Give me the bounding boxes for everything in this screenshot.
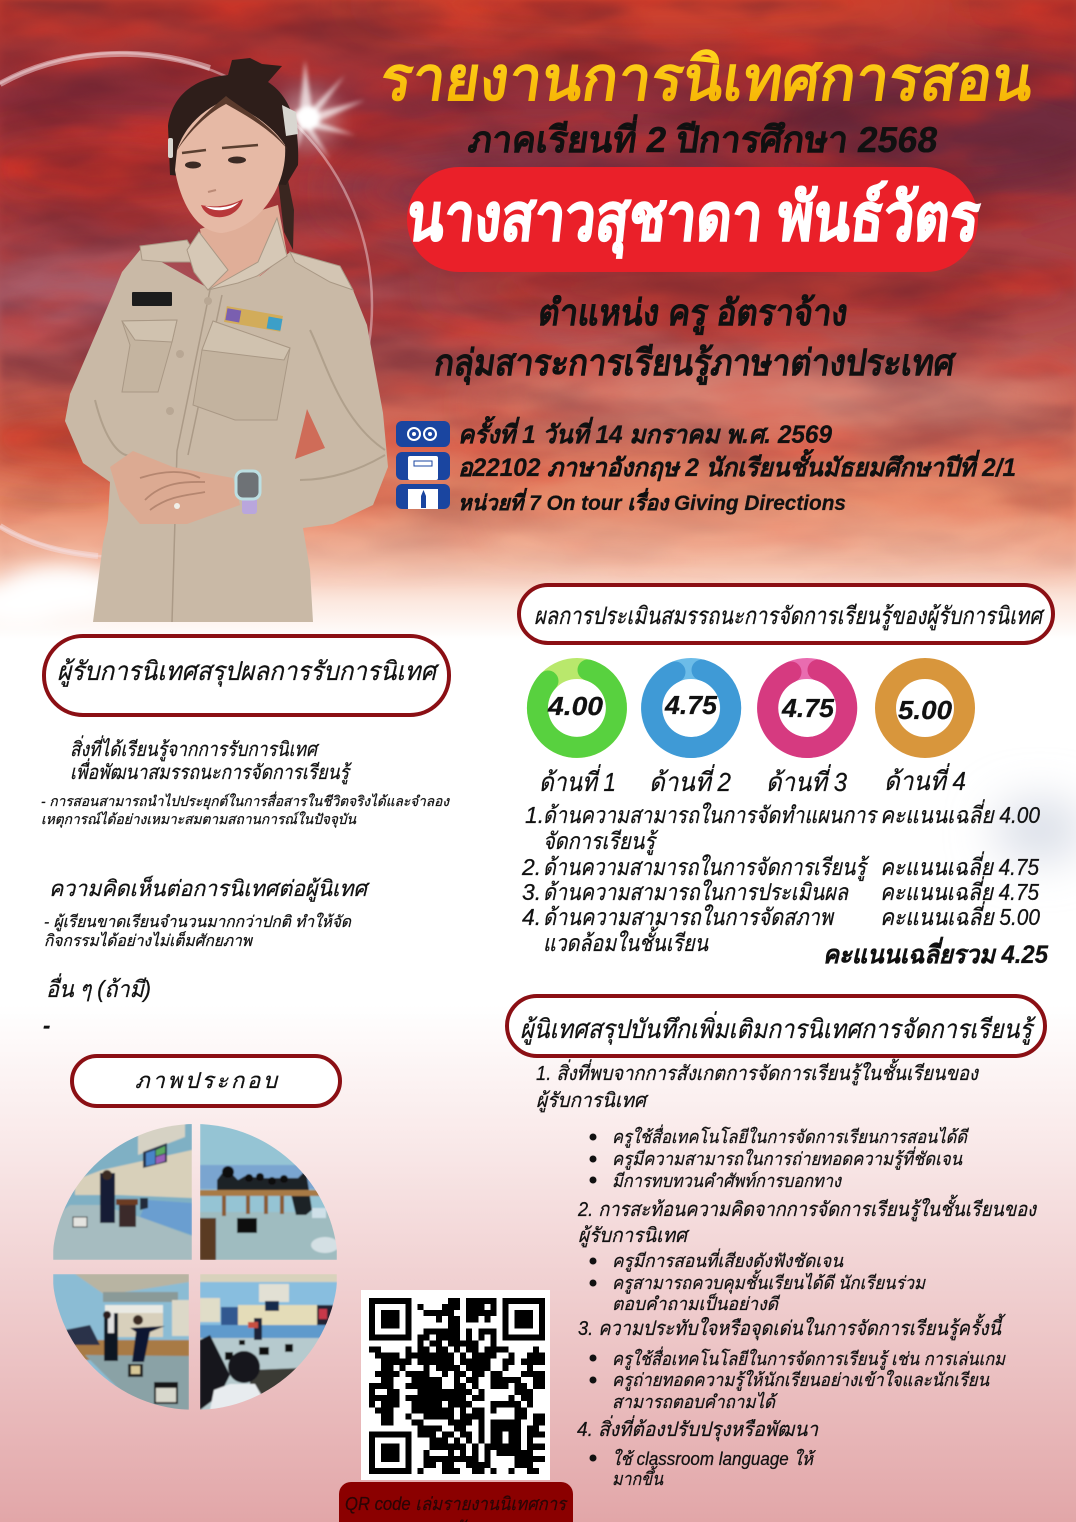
text block: other notes: อื่น ๆ (ถ้ามี): [46, 973, 151, 1002]
supervision session details: หน่วยที่ 7 On tour เรื่อง Giving Directions: [458, 488, 846, 515]
donut labels: ด้านที่ 1: [539, 764, 616, 797]
icon: briefcase: [396, 452, 450, 480]
text block: opinion on supervision: - ผู้เรียนขาดเรียนจำนวนมากกว่าปกติ ทำให้จัด: [44, 912, 353, 932]
note 3: strengths: ครูถ่ายทอดความรู้ให้นักเรียนอย่างเข้าใจและนักเรียน: [612, 1369, 990, 1391]
icon: pencil case: [396, 484, 450, 509]
score list by aspect: 4.: [522, 904, 541, 930]
note 3: strengths: 3. ความประทับใจหรือจุดเด่นในการจัดการเรียนรู้ครั้งนี้: [578, 1313, 1006, 1341]
QR code caption tag: QR code เล่มรายงานนิเทศการ: [345, 1494, 568, 1514]
note 3: strengths: สามารถตอบคำถามได้: [612, 1391, 779, 1412]
note 4: areas to improve: ใช้ classroom language ให้: [612, 1448, 817, 1469]
note 1: classroom observations: [536, 1058, 979, 1191]
position and department: ตำแหน่ง ครู อัตราจ้าง: [535, 292, 851, 336]
photo: students at desks: [200, 1123, 339, 1260]
photo: teacher beside whiteboard: [53, 1123, 192, 1260]
title: รายงานการนิเทศการสอน: [376, 45, 1038, 114]
heading pill: competency results: [519, 585, 1053, 643]
text block: what was learned: เหตุการณ์ได้อย่างเหมาะสมตามสถานการณ์ในปัจจุบัน: [41, 811, 356, 828]
position and department: กลุ่มสาระการเรียนรู้ภาษาต่างประเทศ: [431, 342, 959, 386]
score list by aspect: [521, 799, 1040, 956]
donut labels: ด้านที่ 3: [766, 764, 847, 797]
heading pill: supervisee summary: ผู้รับการนิเทศสรุปผลการรับการนิเทศ: [57, 656, 440, 687]
text block: what was learned: - การสอนสามารถนำไปประยุกต์ในการสื่อสารในชีวิตจริงได้และจำลอง: [41, 791, 450, 810]
score list by aspect: คะแนนเฉลี่ย 5.00: [880, 901, 1040, 930]
overall average score: คะแนนเฉลี่ยรวม 4.25: [823, 936, 1049, 969]
text block: opinion on supervision: กิจกรรมได้อย่างไม่เต็มศักยภาพ: [44, 931, 253, 950]
note 2: reflection: ผู้รับการนิเทศ: [578, 1225, 690, 1248]
note 1: classroom observations: ครูมีความสามารถในการถ่ายทอดความรู้ที่ชัดเจน: [612, 1146, 963, 1170]
note 4: areas to improve: มากขึ้น: [612, 1465, 664, 1489]
note 2: reflection: ครูมีการสอนที่เสียงดังฟังชัดเจน: [612, 1248, 844, 1272]
score list by aspect: จัดการเรียนรู้: [543, 828, 658, 855]
text block: what was learned: สิ่งที่ได้เรียนรู้จากการรับการนิเทศ: [70, 735, 320, 762]
text block: opinion on supervision: [44, 875, 371, 950]
text block: opinion on supervision: ความคิดเห็นต่อการนิเทศต่อผู้นิเทศ: [49, 875, 371, 902]
note 2: reflection: [577, 1194, 1037, 1314]
supervision session details: ครั้งที่ 1 วันที่ 14 มกราคม พ.ศ. 2569: [458, 416, 832, 449]
donut labels: [539, 763, 966, 797]
decorative light ring with sparkle: [0, 53, 372, 557]
donut chart: aspect 4 score 5.00: 5.00: [898, 695, 953, 725]
score list by aspect: แวดล้อมในชั้นเรียน: [543, 926, 709, 956]
note 1: classroom observations: 1. สิ่งที่พบจากการสังเกตการจัดการเรียนรู้ในชั้นเรียนของ: [536, 1058, 979, 1086]
donut chart: aspect 1 score 4.00: [537, 668, 616, 748]
QR code: [361, 1290, 550, 1480]
score list by aspect: 2.: [521, 854, 541, 880]
donut chart: aspect 3 score 4.75: 4.75: [781, 693, 835, 723]
score list by aspect: 1.: [525, 802, 544, 828]
text block: what was learned: เพื่อพัฒนาสมรรถนะการจัดการเรียนรู้: [70, 758, 353, 785]
text block: other notes: -: [43, 1013, 50, 1038]
score list by aspect: ด้านความสามารถในการจัดการเรียนรู้: [543, 854, 869, 881]
supervision session details: [458, 416, 1016, 515]
score list by aspect: ด้านความสามารถในการประเมินผล: [543, 879, 849, 905]
text block: other notes: [43, 973, 151, 1038]
position and department: [431, 292, 959, 386]
score list by aspect: คะแนนเฉลี่ย 4.75: [880, 851, 1039, 880]
photo collage in circle: [53, 1123, 339, 1410]
donut labels: ด้านที่ 4: [884, 763, 966, 796]
score list by aspect: ด้านความสามารถในการจัดทำแผนการ: [543, 802, 878, 828]
heading pill: supervisee summary: [44, 636, 449, 715]
QR code caption tag: [339, 1482, 573, 1522]
icon: glasses: [396, 421, 450, 447]
note 1: classroom observations: ครูใช้สื่อเทคโนโลยีในการจัดการเรียนการสอนได้ดี: [612, 1124, 970, 1148]
portrait: teacher in khaki uniform: [65, 58, 388, 622]
heading pill: supervisor notes: [507, 996, 1045, 1056]
red name banner: [403, 167, 984, 272]
photo: classroom from behind students: [200, 1274, 337, 1410]
score list by aspect: คะแนนเฉลี่ย 4.00: [880, 799, 1040, 828]
photo: teacher with students: [53, 1274, 189, 1410]
text block: what was learned: [41, 735, 450, 828]
heading pill: supervisor notes: ผู้นิเทศสรุปบันทึกเพิ่มเติมการนิเทศการจัดการเรียนรู้: [520, 1011, 1036, 1045]
note 3: strengths: ครูใช้สื่อเทคโนโลยีในการจัดการเรียนรู้ เช่น การเล่นเกม: [612, 1346, 1006, 1370]
note 1: classroom observations: ผู้รับการนิเทศ: [536, 1090, 649, 1113]
donut labels: ด้านที่ 2: [649, 764, 731, 797]
note 1: classroom observations: มีการทบทวนคำศัพท์การบอกทาง: [612, 1171, 842, 1191]
note 3: strengths: [578, 1313, 1006, 1412]
score list by aspect: ด้านความสามารถในการจัดสภาพ: [543, 904, 835, 930]
donut chart: aspect 1 score 4.00: 4.00: [547, 691, 604, 721]
note 2: reflection: 2. การสะท้อนความคิดจากการจัดการเรียนรู้ในชั้นเรียนของ: [577, 1194, 1037, 1222]
heading pill: photo section: [72, 1056, 340, 1106]
heading pill: photo section: ภาพประกอบ: [135, 1068, 279, 1093]
score list by aspect: 3.: [522, 879, 541, 905]
semester subtitle: ภาคเรียนที่ 2 ปีการศึกษา 2568: [466, 114, 941, 160]
note 2: reflection: ครูสามารถควบคุมชั้นเรียนได้ดี นักเรียนร่วม: [612, 1269, 926, 1294]
donut chart: aspect 4 score 5.00: [886, 668, 964, 748]
donut chart: aspect 3 score 4.75: [768, 668, 847, 748]
donut chart: aspect 2 score 4.75: [652, 668, 731, 748]
donut chart: aspect 2 score 4.75: 4.75: [664, 690, 718, 720]
score list by aspect: คะแนนเฉลี่ย 4.75: [880, 876, 1039, 905]
supervision session details: อ22102 ภาษาอังกฤษ 2 นักเรียนชั้นมัธยมศึกษาปีที่ 2/1: [458, 449, 1016, 482]
note 4: areas to improve: [577, 1415, 819, 1489]
note 2: reflection: ตอบคำถามเป็นอย่างดี: [612, 1293, 781, 1314]
note 4: areas to improve: 4. สิ่งที่ต้องปรับปรุงหรือพัฒนา: [577, 1415, 819, 1442]
